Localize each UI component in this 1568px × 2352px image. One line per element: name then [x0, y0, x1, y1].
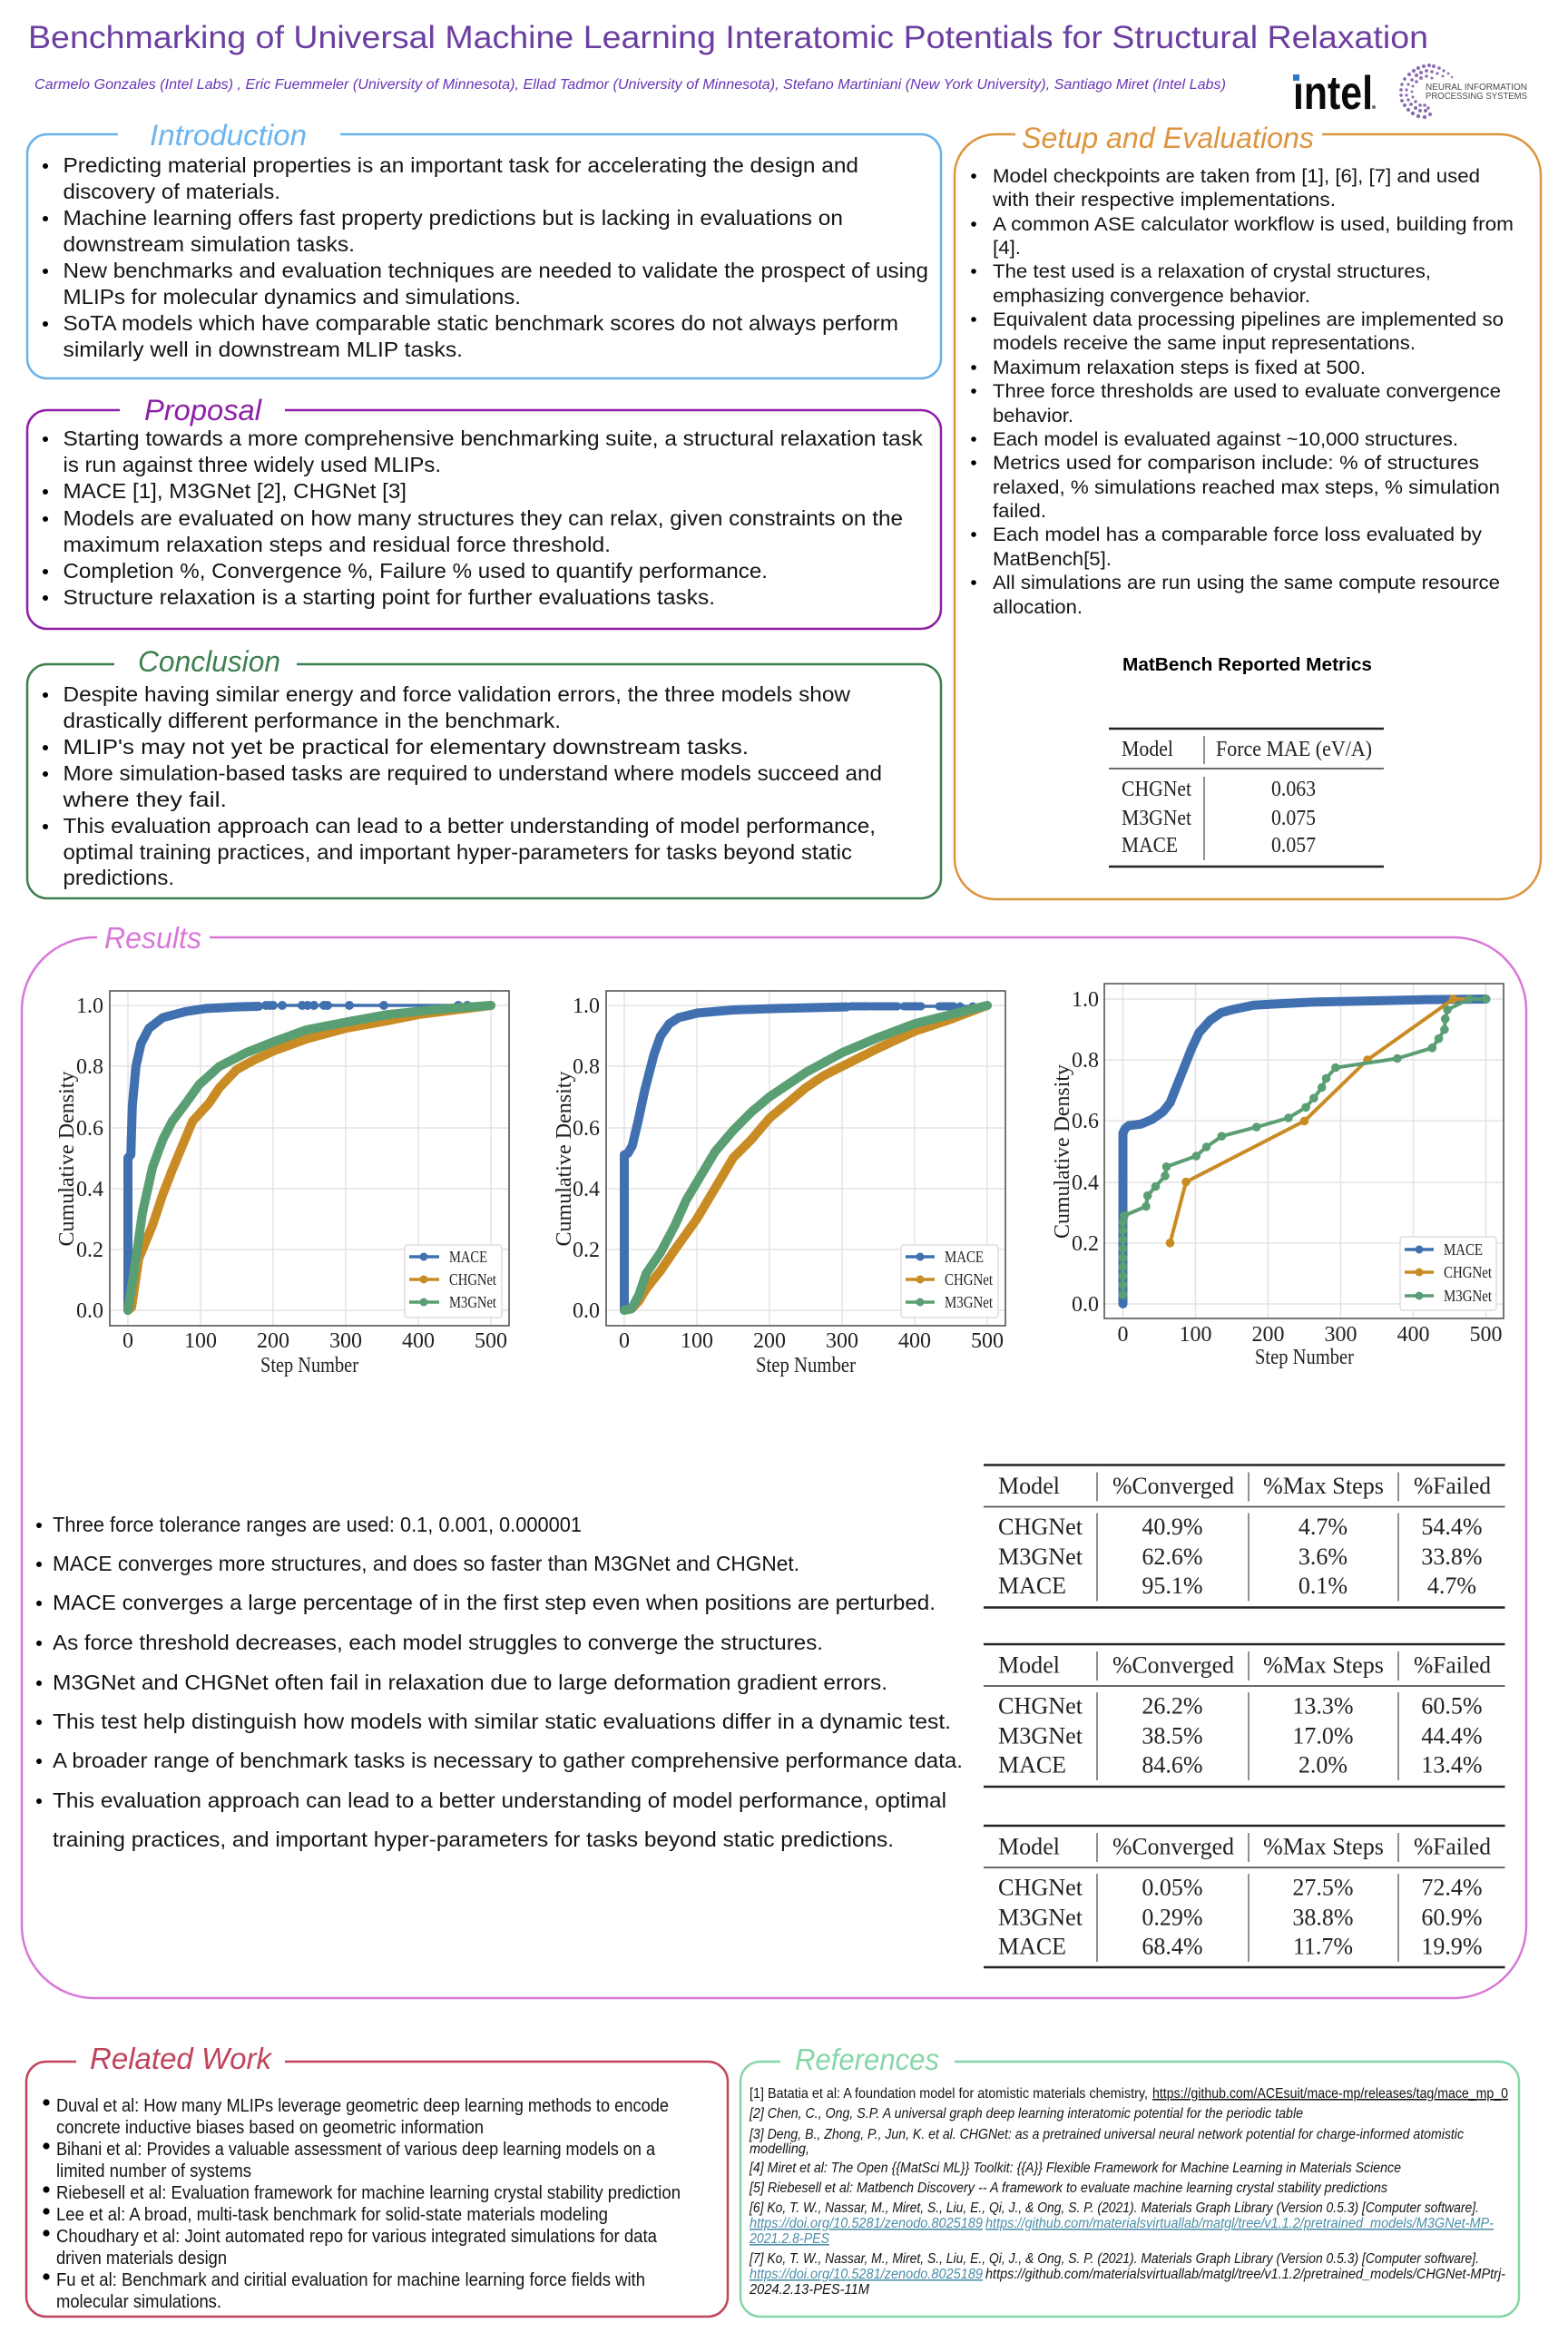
- table: results at tolerance 0.001: 38.5%: [1142, 1722, 1203, 1749]
- table: results at tolerance 0.000001: %Failed: [1414, 1833, 1491, 1860]
- table: results at tolerance 0.1: 54.4%: [1421, 1514, 1483, 1540]
- related work list: limited number of systems: [56, 2161, 251, 2181]
- results bullet list: M3GNet and CHGNet often fail in relaxation due to large deformation gradient errors.: [53, 1671, 887, 1694]
- panel: introduction: [27, 119, 941, 378]
- reference list: 2021.2.8-PES: [749, 2231, 830, 2247]
- reference list: [3] Deng, B., Zhong, P., Jun, K. et al. CHGNet: as a pretrained universal neural network potential for charge-informed atomistic: [749, 2127, 1464, 2142]
- line chart: force tolerance 0.000001: 500: [1470, 1323, 1503, 1347]
- related work list: Bihani et al: Provides a valuable assessment of various deep learning models on a: [56, 2140, 656, 2160]
- title: Benchmarking of Universal Machine Learning Interatomic Potentials for Structural Relaxation: [28, 20, 1428, 55]
- proposal heading: Proposal: [144, 394, 262, 426]
- table heading: matbench reported metrics: MatBench Reported Metrics: [1122, 655, 1372, 675]
- table: results at tolerance 0.1: 40.9%: [1142, 1514, 1203, 1540]
- table: results at tolerance 0.001: 13.4%: [1421, 1751, 1483, 1779]
- introduction bullets: Predicting material properties is an important task for accelerating the design and: [64, 153, 858, 177]
- line chart: force tolerance 0.000001: 400: [1397, 1323, 1430, 1347]
- line chart: force tolerance 0.000001: 1.0: [1072, 988, 1099, 1012]
- table: results at tolerance 0.001: MACE: [998, 1751, 1066, 1779]
- proposal bullets: Structure relaxation is a starting point for further evaluations tasks.: [64, 585, 715, 609]
- results bullet list: This test help distinguish how models with similar static evaluations differ in a dynamic test.: [53, 1710, 951, 1733]
- table: results at tolerance 0.001: M3GNet: [998, 1722, 1083, 1749]
- proposal bullets: [43, 426, 924, 609]
- line chart: force tolerance 0.001: 100: [681, 1329, 713, 1353]
- line chart: force tolerance 0.1: 0.4: [76, 1178, 103, 1201]
- panel: related work: [26, 2042, 728, 2317]
- reference list: [1] Batatia et al: A foundation model for atomistic materials chemistry,: [750, 2086, 1148, 2102]
- references frame: [740, 2062, 1519, 2317]
- table: results at tolerance 0.001: [984, 1644, 1504, 1787]
- setup bullets: Each model has a comparable force loss evaluated by: [993, 524, 1483, 545]
- table: results at tolerance 0.001: %Converged: [1112, 1651, 1234, 1679]
- line chart: force tolerance 0.000001: Step Number: [1255, 1346, 1354, 1369]
- introduction bullets: similarly well in downstream MLIP tasks.: [64, 338, 463, 361]
- table: results at tolerance 0.1: Model: [998, 1473, 1060, 1499]
- logo: neurips: NEURAL INFORMATION: [1426, 82, 1527, 93]
- line chart: force tolerance 0.1: 200: [257, 1329, 289, 1353]
- line chart: force tolerance 0.001: 0.2: [573, 1239, 600, 1262]
- reference list: [7] Ko, T. W., Nassar, M., Miret, S., Liu, E., Qi, J., & Ong, S. P. (2021). Materials Graph Library (Version 0.5.3) [Computer software].: [749, 2251, 1479, 2267]
- related work list: Riebesell et al: Evaluation framework for machine learning crystal stability prediction: [56, 2183, 681, 2203]
- table: results at tolerance 0.001: 13.3%: [1292, 1693, 1354, 1719]
- setup bullets: allocation.: [993, 597, 1083, 618]
- setup bullets: MatBench[5].: [993, 549, 1112, 570]
- line chart: force tolerance 0.000001: 0.8: [1072, 1049, 1099, 1073]
- line chart: force tolerance 0.1: CHGNet: [449, 1270, 496, 1289]
- logo: neurips: [1399, 64, 1527, 119]
- line chart: force tolerance 0.000001: 0.0: [1072, 1293, 1099, 1317]
- table: results at tolerance 0.001: %Failed: [1414, 1651, 1491, 1679]
- conclusion frame: [27, 664, 941, 898]
- line chart: force tolerance 0.000001: [1051, 984, 1504, 1369]
- proposal bullets: MACE [1], M3GNet [2], CHGNet [3]: [64, 479, 407, 503]
- conclusion heading: Conclusion: [138, 645, 280, 678]
- setup bullets: Equivalent data processing pipelines are implemented so: [993, 309, 1504, 330]
- results bullet list: MACE converges more structures, and does so faster than M3GNet and CHGNet.: [53, 1552, 799, 1575]
- table: results at tolerance 0.1: 0.1%: [1298, 1573, 1348, 1599]
- reference list: [4] Miret et al: The Open {{MatSci ML}} Toolkit: {{A}} Flexible Framework for Machine Learning in Materials Science: [749, 2161, 1401, 2176]
- table: results at tolerance 0.001: 17.0%: [1292, 1722, 1354, 1749]
- line chart: force tolerance 0.000001: 0.2: [1072, 1232, 1099, 1256]
- setup bullets: with their respective implementations.: [992, 190, 1336, 211]
- table: matbench force MAE: 0.057: [1271, 834, 1316, 858]
- results bullet list: This evaluation approach can lead to a better understanding of model performance, optimal: [53, 1788, 946, 1812]
- proposal bullets: Starting towards a more comprehensive benchmarking suite, a structural relaxation task: [64, 426, 924, 450]
- setup bullets: Each model is evaluated against ~10,000 structures.: [993, 429, 1458, 450]
- line chart: force tolerance 0.1: 0.6: [76, 1117, 103, 1141]
- introduction bullets: discovery of materials.: [64, 180, 280, 203]
- table: results at tolerance 0.000001: 19.9%: [1421, 1933, 1483, 1960]
- table: results at tolerance 0.000001: 72.4%: [1421, 1875, 1483, 1900]
- conclusion bullets: [43, 682, 882, 889]
- line chart: force tolerance 0.001: 0.0: [573, 1299, 600, 1323]
- line chart: force tolerance 0.000001: 0: [1118, 1323, 1129, 1347]
- conclusion bullets: drastically different performance in the benchmark.: [64, 709, 561, 732]
- line chart: force tolerance 0.1: Step Number: [260, 1354, 358, 1377]
- results bullet list: training practices, and important hyper-parameters for tasks beyond static predictions.: [53, 1828, 894, 1851]
- reference list: https://github.com/materialsvirtuallab/matgl/tree/v1.1.2/pretrained_models/CHGNet-MPtrj-: [985, 2267, 1505, 2282]
- introduction heading: Introduction: [150, 119, 307, 152]
- reference list: https://doi.org/10.5281/zenodo.8025189: [750, 2216, 983, 2231]
- line chart: force tolerance 0.000001: 0.6: [1072, 1110, 1099, 1133]
- table: results at tolerance 0.001: %Max Steps: [1263, 1651, 1384, 1679]
- line chart: force tolerance 0.001: 0.6: [573, 1117, 600, 1141]
- line chart: force tolerance 0.000001: Cumulative Density: [1051, 1064, 1074, 1239]
- line chart: force tolerance 0.1: M3GNet: [449, 1293, 496, 1311]
- setup frame: [955, 134, 1541, 899]
- panel: references: [740, 2043, 1519, 2317]
- line chart: force tolerance 0.1: 500: [475, 1329, 507, 1353]
- table: results at tolerance 0.000001: Model: [998, 1833, 1060, 1860]
- line chart: force tolerance 0.001: CHGNet: [945, 1270, 993, 1289]
- reference list: modelling,: [750, 2141, 809, 2157]
- related work list: molecular simulations.: [56, 2292, 221, 2312]
- line chart: force tolerance 0.001: 500: [971, 1329, 1004, 1353]
- related work frame: [26, 2062, 728, 2317]
- table: results at tolerance 0.000001: 60.9%: [1421, 1904, 1483, 1931]
- introduction bullets: [43, 153, 928, 361]
- panel: proposal: [27, 394, 941, 629]
- table: results at tolerance 0.000001: 27.5%: [1292, 1875, 1354, 1900]
- line chart: force tolerance 0.1: 0.0: [76, 1299, 103, 1323]
- line chart: force tolerance 0.001: 1.0: [573, 995, 600, 1018]
- reference list: https://github.com/ACEsuit/mace-mp/releases/tag/mace_mp_0: [1152, 2086, 1508, 2102]
- table: results at tolerance 0.1: CHGNet: [998, 1514, 1083, 1540]
- references heading: References: [795, 2043, 939, 2076]
- table: matbench force MAE: CHGNet: [1122, 778, 1191, 801]
- setup heading: Setup and Evaluations: [1022, 122, 1314, 154]
- reference list: https://github.com/materialsvirtuallab/matgl/tree/v1.1.2/pretrained_models/M3GNet-MP-: [985, 2216, 1494, 2231]
- table: matbench force MAE: Model: [1122, 738, 1173, 761]
- table: results at tolerance 0.000001: MACE: [998, 1933, 1066, 1960]
- setup bullets: Model checkpoints are taken from [1], [6], [7] and used: [993, 166, 1480, 187]
- authors: Carmelo Gonzales (Intel Labs) , Eric Fuemmeler (University of Minnesota), Ellad Tadmor (University of Minnesota), Stefano Martiniani (New York University), Santiago Miret (Intel Labs): [34, 77, 1226, 93]
- related work list: concrete inductive biases based on geometric information: [56, 2118, 484, 2138]
- proposal bullets: Completion %, Convergence %, Failure % used to quantify performance.: [64, 559, 768, 583]
- line chart: force tolerance 0.1: 400: [402, 1329, 435, 1353]
- table: results at tolerance 0.1: %Failed: [1414, 1473, 1491, 1499]
- proposal frame: [27, 410, 941, 629]
- panel: conclusion: [27, 645, 941, 898]
- setup bullets: A common ASE calculator workflow is used, building from: [993, 214, 1514, 235]
- setup bullets: [4].: [993, 238, 1021, 259]
- line chart: force tolerance 0.001: 0.4: [573, 1178, 600, 1201]
- related work list: Choudhary et al: Joint automated repo for various integrated simulations for data: [56, 2227, 658, 2247]
- line chart: force tolerance 0.1: Cumulative Density: [55, 1071, 79, 1247]
- line chart: force tolerance 0.001: M3GNet: [945, 1293, 993, 1311]
- introduction bullets: downstream simulation tasks.: [64, 232, 355, 256]
- table: results at tolerance 0.000001: %Max Steps: [1263, 1833, 1384, 1860]
- conclusion bullets: This evaluation approach can lead to a better understanding of model performance,: [64, 814, 876, 838]
- line chart: force tolerance 0.1: 0: [122, 1329, 133, 1353]
- setup bullets: models receive the same input representations.: [993, 333, 1416, 354]
- line chart: force tolerance 0.000001: 0.4: [1072, 1171, 1099, 1195]
- table: results at tolerance 0.1: M3GNet: [998, 1544, 1083, 1570]
- conclusion bullets: Despite having similar energy and force validation errors, the three models show: [64, 682, 850, 706]
- reference list: [5] Riebesell et al: Matbench Discovery -- A framework to evaluate machine learning crystal stability predictions: [749, 2180, 1387, 2196]
- conclusion bullets: where they fail.: [62, 788, 227, 811]
- line chart: force tolerance 0.1: MACE: [449, 1248, 487, 1266]
- table: matbench force MAE: [1109, 729, 1384, 867]
- table: results at tolerance 0.001: 60.5%: [1421, 1693, 1483, 1719]
- line chart: force tolerance 0.000001: 200: [1252, 1323, 1285, 1347]
- line chart: force tolerance 0.001: Step Number: [756, 1354, 856, 1377]
- line chart: force tolerance 0.001: [553, 991, 1005, 1377]
- related work heading: Related Work: [90, 2042, 272, 2075]
- line chart: force tolerance 0.001: 0.8: [573, 1055, 600, 1079]
- setup bullets: Three force thresholds are used to evaluate convergence: [993, 381, 1501, 402]
- setup bullets: relaxed, % simulations reached max steps, % simulation: [993, 477, 1500, 498]
- table: results at tolerance 0.1: 4.7%: [1427, 1573, 1476, 1599]
- table: results at tolerance 0.1: 95.1%: [1142, 1573, 1203, 1599]
- line chart: force tolerance 0.000001: 300: [1325, 1323, 1357, 1347]
- line chart: force tolerance 0.001: 300: [826, 1329, 858, 1353]
- table: results at tolerance 0.000001: 0.05%: [1142, 1875, 1203, 1900]
- panel: results: [22, 921, 1526, 1998]
- table: results at tolerance 0.1: %Converged: [1112, 1473, 1234, 1499]
- line chart: force tolerance 0.001: 400: [898, 1329, 931, 1353]
- introduction frame: [27, 134, 941, 378]
- results bullet list: A broader range of benchmark tasks is necessary to gather comprehensive performance data.: [53, 1749, 963, 1772]
- table: results at tolerance 0.1: 62.6%: [1142, 1544, 1203, 1570]
- table: results at tolerance 0.001: 26.2%: [1142, 1693, 1203, 1719]
- conclusion bullets: predictions.: [64, 866, 174, 889]
- introduction bullets: SoTA models which have comparable static benchmark scores do not always perform: [64, 311, 898, 335]
- line chart: force tolerance 0.1: 300: [329, 1329, 362, 1353]
- logo: neurips: PROCESSING SYSTEMS: [1426, 91, 1527, 102]
- results heading: Results: [104, 921, 201, 955]
- table: results at tolerance 0.000001: [984, 1826, 1504, 1967]
- table: results at tolerance 0.001: 2.0%: [1298, 1751, 1348, 1779]
- table: results at tolerance 0.001: Model: [998, 1651, 1060, 1679]
- results bullet list: Three force tolerance ranges are used: 0.1, 0.001, 0.000001: [53, 1513, 582, 1536]
- line chart: force tolerance 0.001: 200: [753, 1329, 786, 1353]
- table: results at tolerance 0.000001: 38.8%: [1292, 1904, 1354, 1931]
- table: results at tolerance 0.1: MACE: [998, 1573, 1066, 1599]
- introduction bullets: New benchmarks and evaluation techniques are needed to validate the prospect of using: [64, 259, 928, 282]
- setup bullets: [971, 166, 1514, 618]
- table: matbench force MAE: 0.075: [1271, 807, 1316, 830]
- setup bullets: All simulations are run using the same compute resource: [993, 573, 1500, 593]
- table: matbench force MAE: MACE: [1122, 834, 1178, 858]
- results bullet list: [36, 1513, 963, 1851]
- table: results at tolerance 0.1: 3.6%: [1298, 1544, 1348, 1570]
- results bullet list: As force threshold decreases, each model struggles to converge the structures.: [53, 1631, 823, 1654]
- introduction bullets: Machine learning offers fast property predictions but is lacking in evaluations on: [64, 206, 843, 230]
- table: results at tolerance 0.000001: M3GNet: [998, 1904, 1083, 1931]
- line chart: force tolerance 0.001: MACE: [945, 1248, 984, 1266]
- related work list: Duval et al: How many MLIPs leverage geometric deep learning methods to encode: [56, 2096, 669, 2116]
- conclusion bullets: More simulation-based tasks are required to understand where models succeed and: [64, 761, 882, 785]
- line chart: force tolerance 0.000001: CHGNet: [1444, 1263, 1492, 1281]
- table: matbench force MAE: Force MAE (eV/A): [1216, 738, 1372, 761]
- table: results at tolerance 0.000001: CHGNet: [998, 1875, 1083, 1900]
- proposal bullets: is run against three widely used MLIPs.: [64, 453, 441, 476]
- conclusion bullets: optimal training practices, and important hyper-parameters for tasks beyond static: [64, 840, 852, 864]
- table: results at tolerance 0.1: 4.7%: [1298, 1514, 1348, 1540]
- setup bullets: emphasizing convergence behavior.: [993, 286, 1310, 307]
- reference list: 2024.2.13-PES-11M: [749, 2282, 869, 2298]
- table: results at tolerance 0.000001: %Converged: [1112, 1833, 1234, 1860]
- setup bullets: failed.: [993, 501, 1046, 522]
- table: results at tolerance 0.001: CHGNet: [998, 1693, 1083, 1719]
- line chart: force tolerance 0.000001: M3GNet: [1444, 1287, 1492, 1305]
- setup bullets: Maximum relaxation steps is fixed at 500.: [993, 358, 1366, 378]
- line chart: force tolerance 0.001: 0: [619, 1329, 630, 1353]
- line chart: force tolerance 0.1: 1.0: [76, 995, 103, 1018]
- line chart: force tolerance 0.000001: MACE: [1444, 1240, 1483, 1259]
- line chart: force tolerance 0.1: 0.8: [76, 1055, 103, 1079]
- line chart: force tolerance 0.1: [55, 991, 509, 1377]
- line chart: force tolerance 0.1: 100: [184, 1329, 217, 1353]
- reference list: [2] Chen, C., Ong, S.P. A universal graph deep learning interatomic potential for the periodic table: [749, 2106, 1303, 2122]
- reference list: [6] Ko, T. W., Nassar, M., Miret, S., Liu, E., Qi, J., & Ong, S. P. (2021). Materials Graph Library (Version 0.5.3) [Computer software].: [749, 2200, 1479, 2216]
- line chart: force tolerance 0.001: Cumulative Density: [553, 1071, 576, 1247]
- table: results at tolerance 0.000001: 11.7%: [1293, 1933, 1353, 1960]
- related work list: driven materials design: [56, 2249, 227, 2269]
- table: results at tolerance 0.000001: 68.4%: [1142, 1933, 1203, 1960]
- related work list: [43, 2096, 681, 2312]
- setup bullets: Metrics used for comparison include: % of structures: [993, 453, 1479, 474]
- table: results at tolerance 0.000001: 0.29%: [1142, 1904, 1203, 1931]
- reference list: https://doi.org/10.5281/zenodo.8025189: [750, 2267, 983, 2282]
- table: results at tolerance 0.1: 33.8%: [1421, 1544, 1483, 1570]
- setup bullets: behavior.: [993, 406, 1073, 426]
- related work list: Lee et al: A broad, multi-task benchmark for solid-state materials modeling: [56, 2205, 608, 2225]
- table: results at tolerance 0.001: 44.4%: [1421, 1722, 1483, 1749]
- setup bullets: The test used is a relaxation of crystal structures,: [993, 261, 1431, 282]
- line chart: force tolerance 0.1: 0.2: [76, 1239, 103, 1262]
- proposal bullets: Models are evaluated on how many structures they can relax, given constraints on the: [64, 506, 903, 530]
- results bullet list: MACE converges a large percentage of in the first step even when positions are perturbed.: [53, 1591, 936, 1614]
- table: results at tolerance 0.1: %Max Steps: [1263, 1473, 1384, 1499]
- related work list: Fu et al: Benchmark and ciritial evaluation for machine learning force fields with: [56, 2270, 645, 2290]
- table: results at tolerance 0.001: 84.6%: [1142, 1751, 1203, 1779]
- reference list: [749, 2086, 1508, 2298]
- table: matbench force MAE: M3GNet: [1122, 807, 1191, 830]
- conclusion bullets: MLIP's may not yet be practical for elementary downstream tasks.: [64, 735, 749, 759]
- table: results at tolerance 0.1: [984, 1465, 1504, 1608]
- line chart: force tolerance 0.000001: 100: [1180, 1323, 1212, 1347]
- logo: intel: intel: [1293, 67, 1373, 120]
- panel: setup and evaluations: [955, 122, 1541, 899]
- introduction bullets: MLIPs for molecular dynamics and simulations.: [64, 285, 521, 309]
- table: matbench force MAE: 0.063: [1271, 778, 1316, 801]
- results frame: [22, 937, 1526, 1998]
- proposal bullets: maximum relaxation steps and residual force threshold.: [64, 533, 611, 556]
